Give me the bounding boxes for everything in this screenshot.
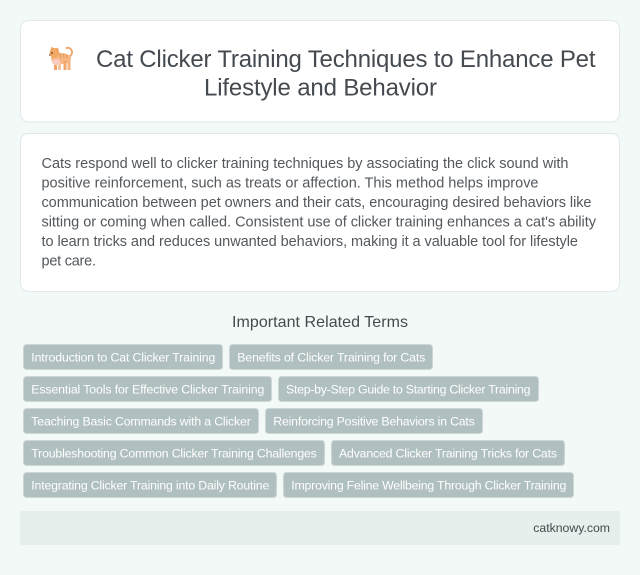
tag: daily routine: Integrating Clicker Training into Daily Routine [31, 478, 269, 492]
tag: troubleshooting: Troubleshooting Common Clicker Training Challenges [31, 446, 317, 460]
icon: cat [49, 47, 72, 70]
tag: positive behaviors: Reinforcing Positive Behaviors in Cats [273, 414, 475, 428]
text block: description: communication between pet owners and their cats, encouraging desired behaviors like [42, 195, 592, 211]
tag: positive behaviors [266, 408, 482, 434]
footer [20, 511, 620, 545]
tag: step-by-step guide [278, 376, 538, 402]
tag: advanced tricks [332, 440, 564, 466]
tag: feline wellbeing [284, 472, 574, 498]
tag: introduction [24, 344, 222, 370]
tag: daily routine [24, 472, 276, 498]
tag: troubleshooting [24, 440, 324, 466]
text block: description: to learn tricks and reduces unwanted behaviors, making it a valuable tool for lifestyle [42, 234, 578, 250]
tag: introduction: Introduction to Cat Clicker Training [31, 350, 215, 364]
title: Lifestyle and Behavior [204, 74, 437, 102]
footer: catknowy.com [533, 521, 610, 535]
tag: advanced tricks: Advanced Clicker Training Tricks for Cats [339, 446, 557, 460]
text block: description: Cats respond well to clicker training techniques by associating the click sound with [42, 156, 568, 172]
panel: title card [20, 20, 620, 122]
tag: basic commands: Teaching Basic Commands with a Clicker [31, 414, 251, 428]
tag list: related terms [24, 344, 574, 498]
tag: feline wellbeing: Improving Feline Wellbeing Through Clicker Training [291, 478, 566, 492]
tag: essential tools [24, 376, 272, 402]
tag: benefits: Benefits of Clicker Training for Cats [237, 350, 425, 364]
tag: basic commands [24, 408, 258, 434]
text block: description [42, 156, 597, 270]
text block: description: positive reinforcement, such as treats or affection. This method helps improve [42, 176, 538, 192]
title: Cat Clicker Training Techniques to Enhance Pet [96, 46, 596, 73]
title [96, 46, 596, 102]
panel: description card [20, 134, 620, 292]
heading: related terms: Important Related Terms [232, 314, 408, 331]
tag: benefits [230, 344, 432, 370]
tag: essential tools: Essential Tools for Effective Clicker Training [31, 382, 264, 396]
tag: step-by-step guide: Step-by-Step Guide to Starting Clicker Training [286, 382, 531, 396]
text block: description: pet care. [42, 254, 96, 270]
text block: description: sitting or coming when called. Consistent use of clicker training enhances a cat's ability [42, 214, 597, 230]
